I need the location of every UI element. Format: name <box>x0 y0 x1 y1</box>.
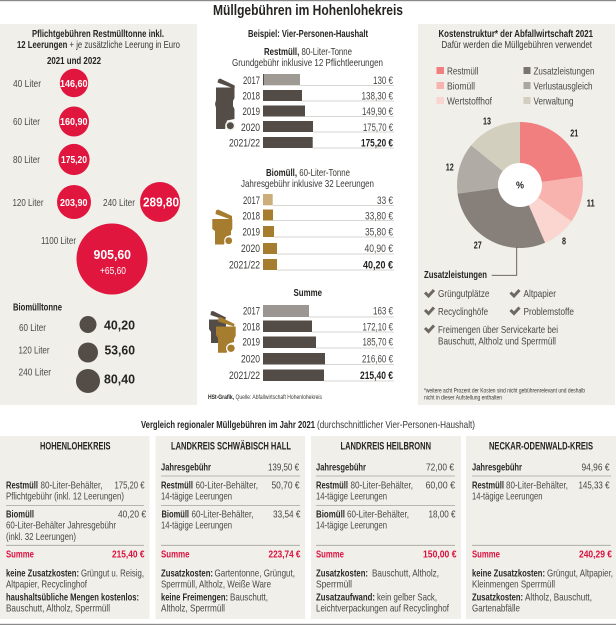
row: Restmüll: 14-tägige Leerungen <box>472 490 543 502</box>
panel: Pflichtgebühren circles <box>0 24 197 405</box>
bar row 2020 <box>241 121 394 134</box>
bubble: 1100 Liter: +65,60 <box>100 266 126 277</box>
list: Zusatzleistungen: Freimengen über Servicekarte bei <box>438 324 558 336</box>
bar row 2019: 185,70 € <box>362 336 393 348</box>
heading: Biomülltonne: Biomülltonne <box>13 302 62 314</box>
row: Summe: Summe <box>472 549 500 561</box>
bubble: 40 Liter <box>13 69 88 97</box>
row: Biomüll <box>6 509 146 543</box>
notes <box>316 567 449 615</box>
row: Restmüll: Restmüll <box>316 480 348 492</box>
bar row 2020: 2020 <box>241 243 260 255</box>
notes: Altpapier, Recyclinghof <box>6 579 87 591</box>
bar row 2021/22: 2021/22 <box>229 260 260 272</box>
row: Summe: 150,00 € <box>423 549 457 561</box>
bar row 2019: 149,90 € <box>362 106 393 118</box>
row: Summe: Summe <box>161 549 190 561</box>
notes: Sperrmüll <box>316 579 352 591</box>
bubble: Bio 60 Liter: 60 Liter <box>19 322 46 334</box>
chart heading: Summe: Summe <box>294 287 322 299</box>
row: Summe <box>161 549 301 561</box>
bubble: 60 Liter: 160,90 <box>60 117 88 128</box>
bar row 2017 <box>243 194 394 207</box>
footnote: *weitere acht Prozent der Kosten sind nicht gebührenrelevant und deshalb <box>424 388 586 394</box>
chart heading: Biomüll <box>241 167 374 190</box>
icon: Restmüll bin <box>215 78 236 131</box>
chart heading: Restmüll <box>232 46 383 69</box>
bar row 2018: 33,80 € <box>365 210 393 222</box>
donut chart: % <box>516 180 524 192</box>
region name: HOHENLOHEKREIS <box>40 440 110 452</box>
notes: keine Zusatzkosten: <box>472 567 545 579</box>
bubble: 40 Liter: 40 Liter <box>13 78 41 90</box>
row: Summe: Summe <box>316 549 344 561</box>
bubble: 60 Liter: 60 Liter <box>13 116 40 128</box>
bubble: 120 Liter: 203,90 <box>60 198 88 209</box>
panel: Vier-Personen-Haushalt <box>208 28 394 401</box>
row: Biomüll: 60-Liter-Behälter Jahresgebühr <box>6 520 116 532</box>
row: Restmüll: 60-Liter-Behälter, <box>196 480 258 492</box>
bubble: 60 Liter <box>13 106 89 136</box>
bar row 2017: 163 € <box>373 306 393 318</box>
bar row 2021/22: 175,20 € <box>361 138 393 150</box>
row: Jahresgebühr <box>161 461 299 473</box>
row: Biomüll: 60-Liter-Behälter, <box>347 509 409 521</box>
source credit: HSt-Grafik, Quelle: Abfallwirtschaft Hohenlohekreis <box>208 395 322 401</box>
row: Restmüll: 60,00 € <box>426 480 455 492</box>
bar row 2021/22 <box>229 370 394 382</box>
bubble: 240 Liter: 240 Liter <box>103 197 135 209</box>
bar row 2020 <box>241 353 394 366</box>
panel heading: Pflichtgebühren: Pflichtgebühren Restmülltonne inkl. <box>32 28 164 40</box>
bar row 2017: 2017 <box>243 195 260 207</box>
bar row 2021/22: 215,40 € <box>360 370 393 382</box>
comparison heading: (durchschnittlicher Vier-Personen-Haushalt) <box>317 419 475 431</box>
row: Summe <box>472 549 612 561</box>
row: Restmüll: 80-Liter-Behälter, <box>40 480 102 492</box>
bubble: Bio 240 Liter <box>18 366 135 393</box>
donut chart <box>446 116 595 252</box>
row: Restmüll <box>161 480 300 502</box>
row: Restmüll: Restmüll <box>472 480 504 492</box>
list: Zusatzleistungen: Recyclinghöfe <box>438 306 488 318</box>
bubble: 1100 Liter: 905,60 <box>94 247 131 262</box>
bubble: Bio 120 Liter: 53,60 <box>104 342 135 358</box>
notes: Bauschutt, Altholz, <box>372 567 439 579</box>
chart: Biomüll <box>212 167 394 272</box>
bubble: 240 Liter: 289,80 <box>143 196 179 210</box>
notes: Zusatzkosten: <box>472 592 523 604</box>
bar row 2019 <box>242 336 394 348</box>
bar row 2018: 138,30 € <box>362 90 393 102</box>
bubble: 80 Liter <box>13 144 90 175</box>
legend: Verwaltung <box>534 96 574 108</box>
row: Biomüll <box>316 509 456 532</box>
chart: Summe <box>209 287 394 382</box>
donut chart: 8 <box>562 236 566 248</box>
row: Biomüll: 60-Liter-Behälter, <box>192 509 254 521</box>
notes <box>472 567 613 615</box>
legend: Biomüll <box>447 80 475 92</box>
list: Zusatzleistungen: Altpapier <box>524 288 556 300</box>
subheading: 2021 und 2022: 2021 und 2022 <box>47 55 101 67</box>
list: Zusatzleistungen: Problemstoffe <box>524 306 574 318</box>
list: Zusatzleistungen: Grüngutplätze <box>438 288 490 300</box>
bar row 2019: 2019 <box>242 106 260 118</box>
row: Restmüll: 14-tägige Leerungen <box>161 490 232 502</box>
list: Zusatzleistungen <box>425 288 574 348</box>
notes: haushaltsübliche Mengen kostenlos: <box>6 592 139 604</box>
leader line <box>492 247 517 275</box>
legend: Verlustausgleich <box>534 80 593 92</box>
heading: Beispiel: Beispiel: Vier-Personen-Haushalt <box>248 28 368 40</box>
row: Summe: Summe <box>6 549 34 561</box>
list: Zusatzleistungen: Bauschutt, Altholz und Sperrmüll <box>438 336 556 348</box>
bar row 2020: 175,70 € <box>363 122 393 134</box>
row: Biomüll: Biomüll <box>162 509 189 521</box>
legend: Restmüll <box>447 66 478 78</box>
icon: Biomüll bin <box>212 210 233 245</box>
bar row 2018: 2018 <box>242 90 260 102</box>
notes: Leichtverpackungen auf Recyclinghof <box>316 603 449 615</box>
row: Restmüll <box>316 480 455 502</box>
row: Biomüll: (inkl. 32 Leerungen) <box>6 531 76 543</box>
bar row 2020: 40,90 € <box>364 243 393 255</box>
bubble: Bio 60 Liter <box>19 316 135 334</box>
bubble: Bio 120 Liter <box>18 342 135 362</box>
bar row 2017: 2017 <box>243 75 260 87</box>
chart heading: Restmüll: Grundgebühr inklusive 12 Pflichtleerungen <box>232 57 383 69</box>
chart heading: Biomüll: Jahresgebühr inklusive 32 Leerungen <box>241 178 374 190</box>
bar row 2017: 2017 <box>243 306 260 318</box>
heading: Zusatzleistungen: Zusatzleistungen <box>424 269 487 281</box>
bar row 2021/22: 2021/22 <box>229 138 260 150</box>
notes: Gartentonne, Grüngut, <box>214 567 295 579</box>
chart heading: Biomüll: Biomüll, 60-Liter-Tonne <box>266 167 350 179</box>
bar row 2019: 35,80 € <box>365 226 393 238</box>
row: Jahresgebühr: Jahresgebühr <box>472 461 522 473</box>
row: Restmüll: 14-tägige Leerungen <box>316 490 387 502</box>
panel: Neckar-Odenwald-Kreis <box>466 436 616 619</box>
comparison heading: Vergleich regionaler Müllgebühren im Jahr 2021 <box>141 419 315 431</box>
icon: both bins <box>209 311 236 353</box>
region name: LANDKREIS SCHWÄBISCH HALL <box>171 440 291 452</box>
bubble: 1100 Liter: 1100 Liter <box>41 235 76 247</box>
legend: Zusatzleistungen <box>534 66 595 78</box>
row: Biomüll: 18,00 € <box>428 509 456 521</box>
notes <box>161 567 295 615</box>
bar row 2018: 2018 <box>242 322 260 334</box>
donut chart: 11 <box>587 198 595 210</box>
bar row 2018: 2018 <box>242 210 260 222</box>
row: Biomüll: 40,20 € <box>118 509 146 521</box>
donut chart: 12 <box>446 162 454 174</box>
legend <box>436 66 595 108</box>
notes: Kleinmengen Sperrmüll <box>472 579 555 591</box>
row: Biomüll: 33,54 € <box>273 509 301 521</box>
bubble: Bio 240 Liter: 80,40 <box>104 372 135 386</box>
row: Jahresgebühr: Jahresgebühr <box>316 461 366 473</box>
panel heading: Pflichtgebühren: 12 Leerungen + je zusätzliche Leerung in Euro <box>17 39 180 51</box>
legend: Wertstoffhof <box>447 96 492 108</box>
chart heading: Restmüll: Restmüll, 80-Liter-Tonne <box>264 46 352 58</box>
row: Restmüll: Restmüll <box>161 480 193 492</box>
notes: Gartenabfälle <box>472 603 520 615</box>
bubble: 1100 Liter <box>41 224 148 294</box>
bar row 2019 <box>242 106 394 118</box>
title: Müllgebühren im Hohenlohekreis <box>213 3 403 19</box>
bar row 2020: 2020 <box>241 122 260 134</box>
bar row 2021/22 <box>229 137 394 150</box>
bar row 2017 <box>243 74 394 87</box>
row: Jahresgebühr: 94,96 € <box>582 461 610 473</box>
bubble: 80 Liter: 80 Liter <box>13 154 40 166</box>
notes: Sperrmüll, Altholz, Weiße Ware <box>161 579 271 591</box>
row: Restmüll: 80-Liter-Behälter, <box>350 480 413 492</box>
row: Restmüll: Restmüll <box>6 480 38 492</box>
row: Jahresgebühr: 139,50 € <box>268 461 299 473</box>
notes: kein gelber Sack, <box>377 592 437 604</box>
notes: Altholz, Sperrmüll <box>161 603 225 615</box>
bar row 2021/22: 2021/22 <box>229 370 260 382</box>
bar row 2020: 216,60 € <box>362 354 393 366</box>
bubble: Bio 120 Liter: 120 Liter <box>18 344 50 356</box>
notes: keine Freimengen: <box>161 592 228 604</box>
bar row 2019: 2019 <box>242 226 260 238</box>
bubble: 120 Liter <box>12 185 91 219</box>
bar row 2019 <box>242 226 394 238</box>
region name: LANDKREIS HEILBRONN <box>340 440 431 452</box>
bar row 2020 <box>241 243 394 255</box>
row: Summe <box>316 549 457 561</box>
bubble: Bio 240 Liter: 240 Liter <box>18 366 51 378</box>
notes: Zusatzaufwand: <box>316 592 375 604</box>
notes: Zusatzkosten: <box>161 567 213 579</box>
notes: Bauschutt, <box>230 592 268 604</box>
row: Restmüll: 50,70 € <box>272 480 300 492</box>
footnote: nicht in dieser Aufstellung enthalten <box>424 396 502 402</box>
donut chart: 27 <box>474 240 482 252</box>
bar row 2018: 172,10 € <box>362 322 393 334</box>
bar row 2017: 130 € <box>373 75 393 87</box>
notes: Grüngut u. Reisig, <box>81 567 144 579</box>
notes: Zusatzkosten: <box>316 567 368 579</box>
notes: keine Zusatzkosten: <box>6 567 79 579</box>
row: Summe: 223,74 € <box>268 549 301 561</box>
donut chart: 21 <box>570 128 578 140</box>
panel: Landkreis Schwäbisch Hall <box>156 436 305 619</box>
panel heading: Pflichtgebühren <box>17 28 180 51</box>
bubble: 120 Liter: 120 Liter <box>12 197 44 209</box>
row: Jahresgebühr: 72,00 € <box>426 461 454 473</box>
bar row 2020: 2020 <box>241 354 260 366</box>
footnote <box>424 388 586 402</box>
bar row 2021/22: 40,20 € <box>363 260 393 272</box>
row: Restmüll: 80-Liter-Behälter, <box>506 480 568 492</box>
bubble: 80 Liter: 175,20 <box>61 155 87 166</box>
bar row 2021/22 <box>229 259 394 272</box>
bar row 2018 <box>242 90 394 102</box>
bar row 2018 <box>242 320 394 334</box>
row: Jahresgebühr: Jahresgebühr <box>161 461 211 473</box>
row: Biomüll: Biomüll <box>316 509 345 521</box>
bar row 2017: 33 € <box>377 195 393 207</box>
row: Summe <box>6 549 145 561</box>
row: Biomüll: Biomüll <box>6 509 34 521</box>
row: Biomüll: 14-tägige Leerungen <box>161 520 232 532</box>
row: Restmüll <box>6 480 145 502</box>
donut chart: 13 <box>483 116 491 128</box>
row: Jahresgebühr <box>472 461 610 473</box>
panel heading: Kostenstruktur <box>438 28 593 51</box>
row: Restmüll <box>472 480 610 502</box>
row: Jahresgebühr <box>316 461 454 473</box>
panel: Landkreis Heilbronn <box>311 436 461 619</box>
bar row 2017 <box>243 305 394 318</box>
bar row 2019: 2019 <box>242 336 260 348</box>
bubble: 240 Liter <box>103 182 180 222</box>
notes <box>6 567 144 615</box>
panel: Kostenstruktur <box>418 24 615 405</box>
chart: Restmüll <box>215 46 394 150</box>
notes: Altholz, Bauschutt, <box>525 592 592 604</box>
bubble: Bio 60 Liter: 40,20 <box>104 318 135 332</box>
row: Summe: 215,40 € <box>112 549 145 561</box>
row: Biomüll <box>161 509 301 532</box>
panel: Hohenlohekreis <box>0 436 150 619</box>
bubble: 40 Liter: 146,60 <box>60 79 88 90</box>
row: Restmüll: Pflichtgebühr (inkl. 12 Leerungen) <box>6 490 124 502</box>
row: Restmüll: 175,20 € <box>114 480 145 492</box>
notes: Bauschutt, Altholz, Sperrmüll <box>6 603 110 615</box>
bar row 2018 <box>242 210 394 222</box>
row: Biomüll: 14-tägige Leerungen <box>316 520 387 532</box>
